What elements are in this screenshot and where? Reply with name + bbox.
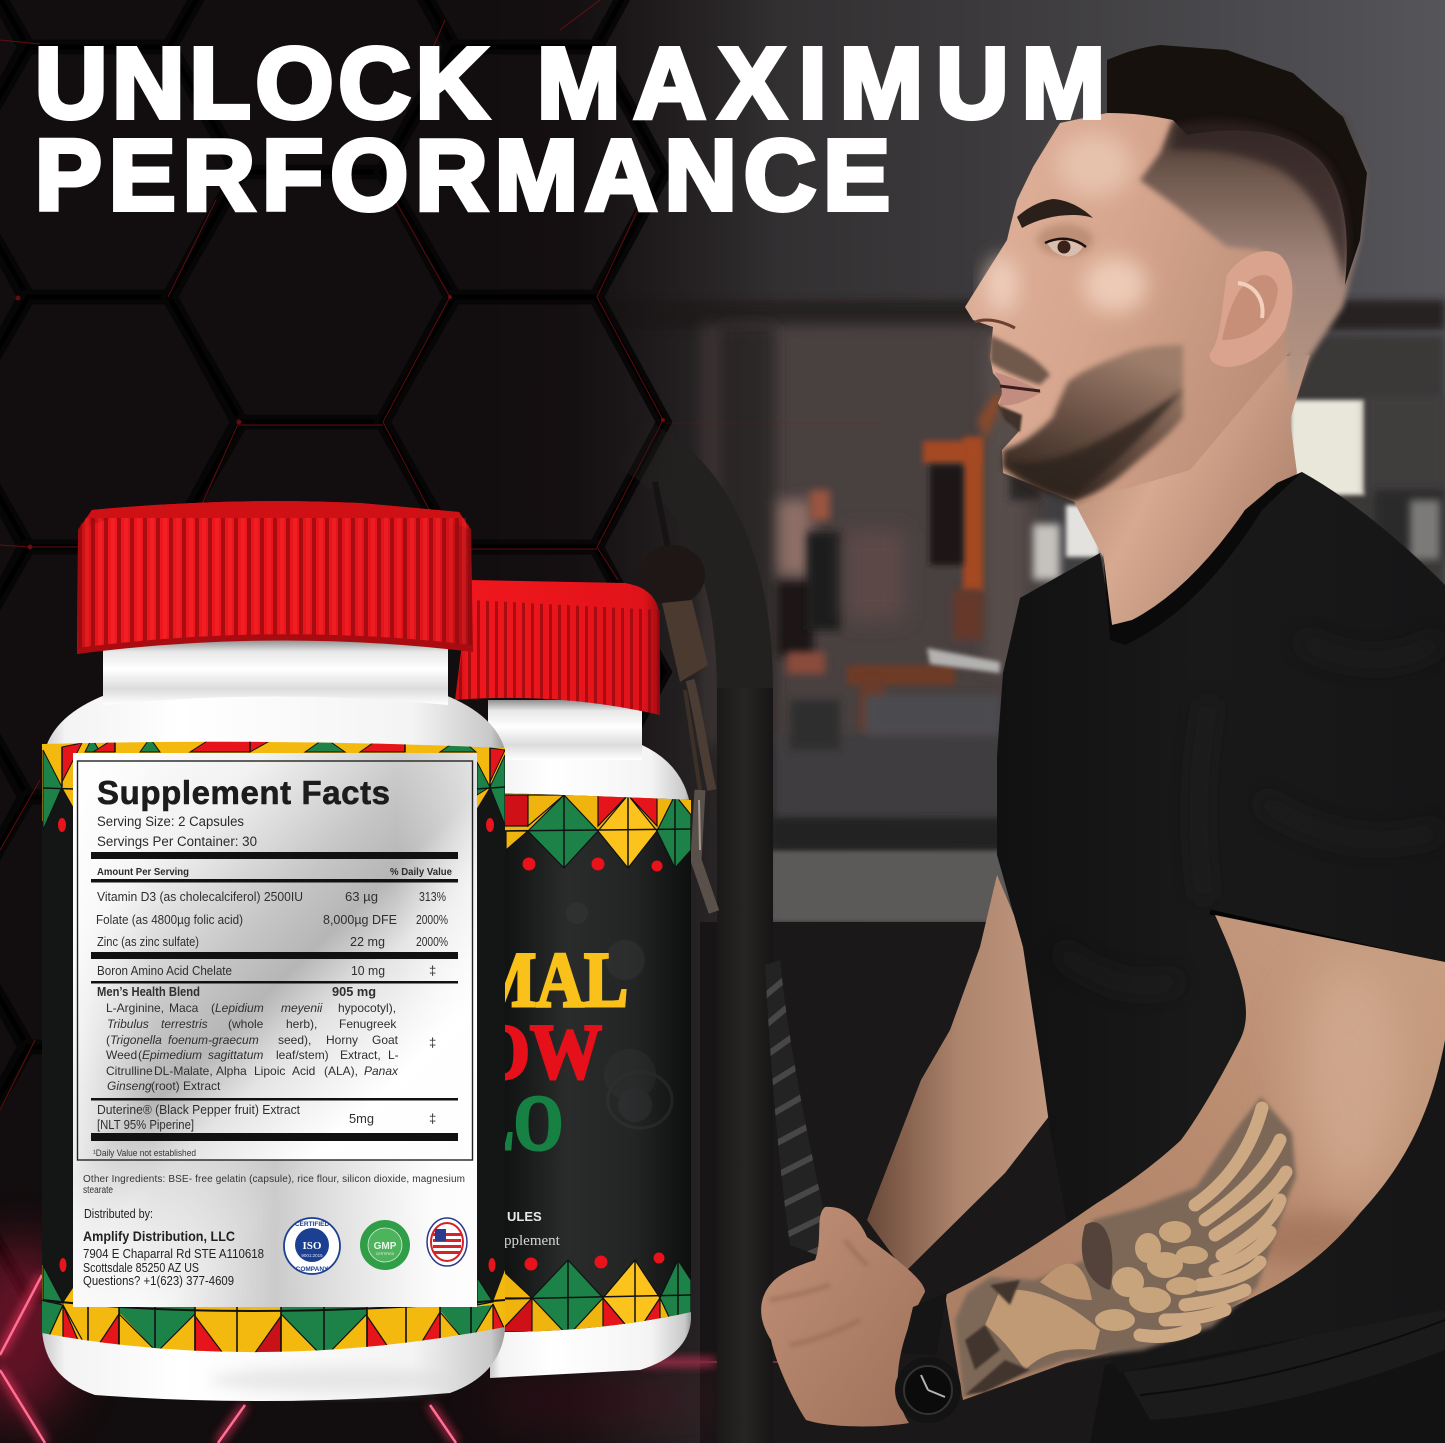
man: forearm tattoo wing	[955, 1097, 1296, 1397]
product name fragments: LO	[472, 1079, 563, 1166]
nutrient rows: 22 mg	[350, 934, 385, 949]
men's health blend: (	[211, 1001, 215, 1015]
men's health blend: (root)	[151, 1079, 180, 1093]
man: hand shading	[770, 1240, 868, 1345]
men's health blend: Horny	[326, 1033, 358, 1047]
badge: GMP certified: GMP	[374, 1241, 397, 1252]
tattoo: long feathers	[1140, 1108, 1286, 1336]
badge: ISO certified: 9001:2015	[301, 1253, 323, 1258]
duterine row: 5mg	[349, 1111, 374, 1126]
nutrient rows: Boron Amino Acid Chelate	[97, 963, 232, 978]
facts box outline	[78, 761, 472, 1160]
head: eye socket shadow	[1037, 224, 1093, 256]
head: ear	[1210, 251, 1292, 367]
label watermark swirl	[626, 940, 674, 1130]
rope	[765, 960, 823, 1255]
man: head	[965, 45, 1367, 503]
background: hexagon lines	[0, 0, 664, 1297]
men's health blend: herb),	[286, 1017, 317, 1031]
product name fragments	[505, 952, 627, 1152]
men's health blend: L-Arginine,	[106, 1001, 164, 1015]
men's health blend: Acid	[292, 1064, 315, 1078]
serving info: Servings Per Container: 30	[97, 834, 257, 849]
other ingredients	[83, 1174, 465, 1196]
head: eye	[1045, 239, 1086, 256]
back bottle cap	[455, 580, 660, 715]
back bottle label: pplement	[504, 1233, 561, 1249]
footnote: ¹Daily Value not established	[93, 1148, 196, 1158]
men's health blend: hypocotyl),	[338, 1001, 396, 1015]
chain ball	[639, 545, 705, 605]
gym: blurred equipment cluster	[777, 490, 1000, 750]
men's health blend: sagittatum	[208, 1048, 263, 1062]
men's health blend: terrestris	[161, 1017, 208, 1031]
bottom diamond border	[500, 1260, 692, 1336]
background: left fade	[430, 0, 780, 1443]
badge: GMP certified	[360, 1220, 410, 1270]
distributor block: 7904 E Chaparral Rd STE A110618	[83, 1247, 264, 1261]
men's health blend: (	[138, 1048, 142, 1062]
man: wristwatch	[895, 1293, 961, 1423]
men's health blend: leaf/stem)	[276, 1048, 329, 1062]
badge: ISO certified	[284, 1218, 340, 1274]
men's health blend: Citrulline	[106, 1064, 153, 1078]
men's health blend: Lipoic	[254, 1064, 285, 1078]
label red dots	[58, 818, 496, 1272]
duterine row: Duterine® (Black Pepper fruit) Extract	[97, 1102, 300, 1117]
tattoo: covert feathers	[1095, 1221, 1208, 1331]
serving info: Serving Size: 2 Capsules	[97, 814, 244, 829]
front bottle neck	[103, 640, 448, 705]
facts table rules	[91, 852, 458, 1141]
distributor block: Scottsdale 85250 AZ US	[83, 1261, 199, 1275]
supplement facts panel	[73, 753, 477, 1307]
badge: ISO certified: COMPANY	[296, 1266, 329, 1273]
shirt: collar	[1103, 472, 1302, 645]
head: hair fade shading	[1170, 121, 1349, 285]
duterine row: [NLT 95% Piperine]	[97, 1117, 194, 1132]
duterine row	[97, 1102, 436, 1132]
men's health blend: Maca	[169, 1001, 199, 1015]
tattoo: figure head and body	[1082, 1222, 1112, 1290]
head: cheek highlight	[1083, 257, 1147, 313]
man	[761, 45, 1445, 1443]
product name fragments: OW	[474, 1008, 602, 1095]
nutrient rows: 10 mg	[351, 963, 385, 978]
nutrient rows	[96, 889, 448, 978]
distributor block: Amplify Distribution, LLC	[83, 1228, 235, 1244]
men's health blend	[97, 985, 436, 1093]
distributor block: Distributed by:	[84, 1206, 153, 1221]
nutrient rows: 63 µg	[345, 889, 378, 904]
man: neck	[1073, 355, 1310, 640]
chain bracket	[662, 600, 708, 682]
title: UNLOCK	[35, 28, 488, 140]
head: eyebrow	[1017, 199, 1093, 228]
front bottle cap	[77, 501, 473, 654]
tattoo: dark lower shapes	[965, 1280, 1030, 1395]
men's health blend: Ginseng	[107, 1079, 152, 1093]
men's health blend: Alpha	[216, 1064, 247, 1078]
label dots	[522, 858, 664, 1270]
label bottom pattern	[40, 1265, 505, 1360]
man: pants	[1090, 1285, 1445, 1443]
men's health blend: Extract	[183, 1079, 221, 1093]
title: PERFORMANCE	[35, 120, 890, 232]
man: rear forearm	[867, 875, 1050, 1272]
other ingredients: Other Ingredients: BSE- free gelatin (capsule), rice flour, silicon dioxide, magnesium	[83, 1174, 465, 1185]
back bottle label	[504, 793, 691, 1332]
head: beard	[1002, 345, 1183, 502]
nutrient rows: Vitamin D3 (as cholecalciferol) 2500IU	[97, 889, 303, 904]
men's health blend: Extract,	[340, 1048, 381, 1062]
head: nostril	[975, 320, 1015, 328]
front bottle	[40, 501, 510, 1401]
man: elbow highlight	[1269, 973, 1410, 1266]
label top pattern	[43, 738, 505, 830]
table header: % Daily Value	[390, 866, 452, 878]
background: red node glints	[16, 295, 665, 550]
badge: ISO certified: ISO	[303, 1240, 322, 1252]
top diamond border	[500, 793, 692, 868]
badge: GMP certified: CERTIFIED	[376, 1252, 395, 1256]
shirt: soft folds	[1060, 640, 1440, 986]
shirt: sleeve hem	[1210, 912, 1445, 965]
background: red hex highlights	[0, 0, 880, 1110]
men's health blend: seed),	[278, 1033, 311, 1047]
nutrient rows: Zinc (as zinc sulfate)	[97, 934, 199, 949]
men's health blend: ‡	[429, 1035, 436, 1050]
nutrient rows: 2000%	[416, 934, 448, 949]
serving info	[97, 814, 257, 849]
men's health blend: meyenii	[281, 1001, 323, 1015]
other ingredients: stearate	[83, 1185, 113, 1196]
men's health blend: (ALA),	[324, 1064, 358, 1078]
front bottle base shading	[210, 1368, 450, 1392]
man: black t-shirt	[997, 472, 1445, 1372]
back bottle	[455, 580, 692, 1378]
capsule count and supplement line: ULES	[507, 1209, 542, 1224]
back bottle neck	[488, 700, 642, 760]
nutrient rows: 313%	[419, 889, 446, 904]
men's health blend: DL-Malate,	[154, 1064, 213, 1078]
distributor block	[83, 1206, 264, 1288]
nutrient rows: Folate (as 4800µg folic acid)	[96, 912, 243, 927]
title: MAXIMUM	[537, 28, 1105, 140]
title	[35, 28, 1105, 232]
table header: Amount Per Serving	[97, 866, 189, 878]
head: beard dark core	[1008, 390, 1183, 495]
nutrient rows: 8,000µg DFE	[323, 912, 397, 927]
nutrient rows: 2000%	[416, 912, 448, 927]
head: lips	[994, 372, 1042, 405]
background: pink neon glow	[0, 1240, 780, 1443]
head: moustache	[990, 335, 1050, 385]
man: hand gripping rope	[761, 1207, 925, 1426]
label black side strips	[42, 788, 73, 1302]
head: chin patch	[998, 405, 1022, 432]
head: forehead highlight	[1057, 133, 1133, 197]
head: faded side hair	[1140, 100, 1367, 400]
product name fragments: MAL	[474, 936, 628, 1023]
head: nose highlight	[986, 257, 1018, 313]
head: hair top	[1107, 45, 1367, 285]
men's health blend: Men’s Health Blend	[97, 985, 200, 999]
men's health blend: L-	[388, 1048, 399, 1062]
background: blurred gym interior	[500, 0, 1445, 1443]
distributor block: Questions? +1(623) 377-4609	[83, 1274, 234, 1288]
duterine row: ‡	[429, 1111, 436, 1126]
front bottle label	[40, 738, 510, 1380]
back bottle body	[490, 700, 691, 1378]
men's health blend: Weed	[106, 1048, 137, 1062]
men's health blend: (whole	[228, 1017, 264, 1031]
front bottle body	[42, 695, 505, 1401]
men's health blend: Epimedium	[142, 1048, 202, 1062]
badge: ISO certified: CERTIFIED	[295, 1221, 329, 1228]
men's health blend: Tribulus	[107, 1017, 149, 1031]
nutrient rows: ‡	[429, 963, 436, 978]
men's health blend: Trigonella	[110, 1033, 162, 1047]
men's health blend: Panax	[364, 1064, 399, 1078]
gym: bright window and lights	[1010, 395, 1445, 580]
head: face shape	[965, 110, 1300, 503]
men's health blend: Lepidium	[215, 1001, 264, 1015]
man: front arm under sleeve and forearm	[945, 915, 1445, 1400]
cable machine pipe and chain	[625, 442, 773, 1443]
facts heading: Supplement Facts	[97, 774, 390, 811]
men's health blend: foenum-graecum	[168, 1033, 259, 1047]
men's health blend: 905 mg	[332, 985, 376, 999]
table header	[97, 866, 452, 878]
chain links	[690, 680, 712, 790]
men's health blend: Goat	[372, 1033, 399, 1047]
men's health blend: Fenugreek	[339, 1017, 397, 1031]
men's health blend: (	[106, 1033, 110, 1047]
badge: USA flag	[427, 1218, 467, 1266]
gym: orange rack	[923, 391, 1003, 640]
